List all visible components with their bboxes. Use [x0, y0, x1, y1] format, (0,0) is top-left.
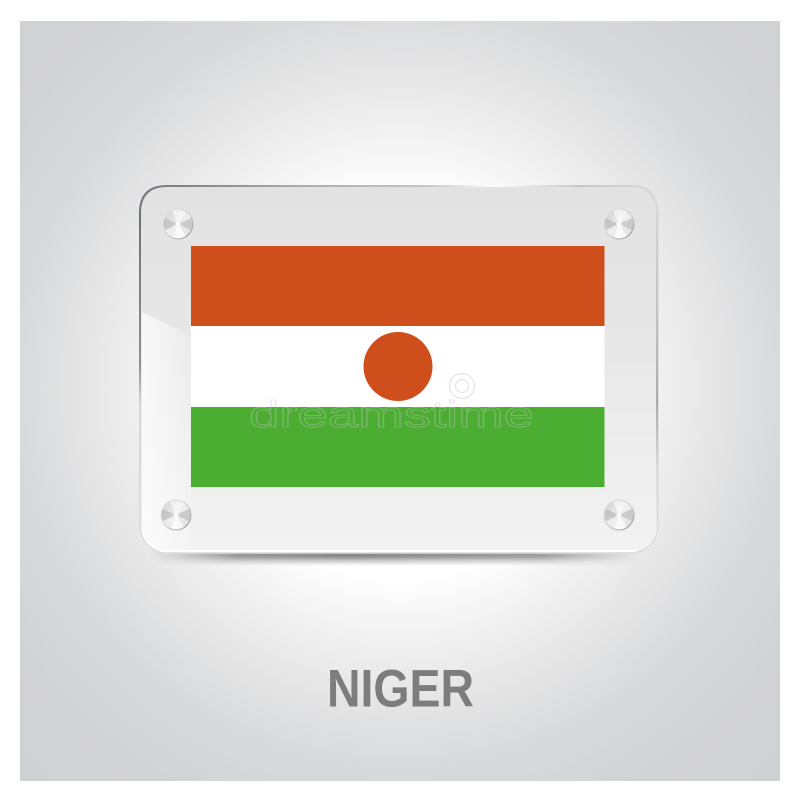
glass shine	[142, 312, 191, 553]
bolt: top left	[162, 208, 194, 240]
bolt: top right	[604, 208, 634, 240]
bolt: bottom right	[604, 500, 634, 530]
flag of Niger	[191, 246, 604, 487]
plate edge	[140, 186, 658, 553]
orange disc	[364, 332, 432, 401]
watermark: dreamstime	[249, 394, 534, 435]
plate body	[140, 186, 658, 553]
watermark	[249, 374, 534, 435]
white stripe	[191, 326, 604, 407]
bolt: bottom left	[160, 500, 192, 530]
green stripe	[191, 407, 604, 487]
country name: NIGER	[327, 660, 474, 718]
plate shadow	[157, 552, 630, 565]
glass plate with flag	[140, 186, 658, 553]
orange stripe	[191, 246, 604, 326]
